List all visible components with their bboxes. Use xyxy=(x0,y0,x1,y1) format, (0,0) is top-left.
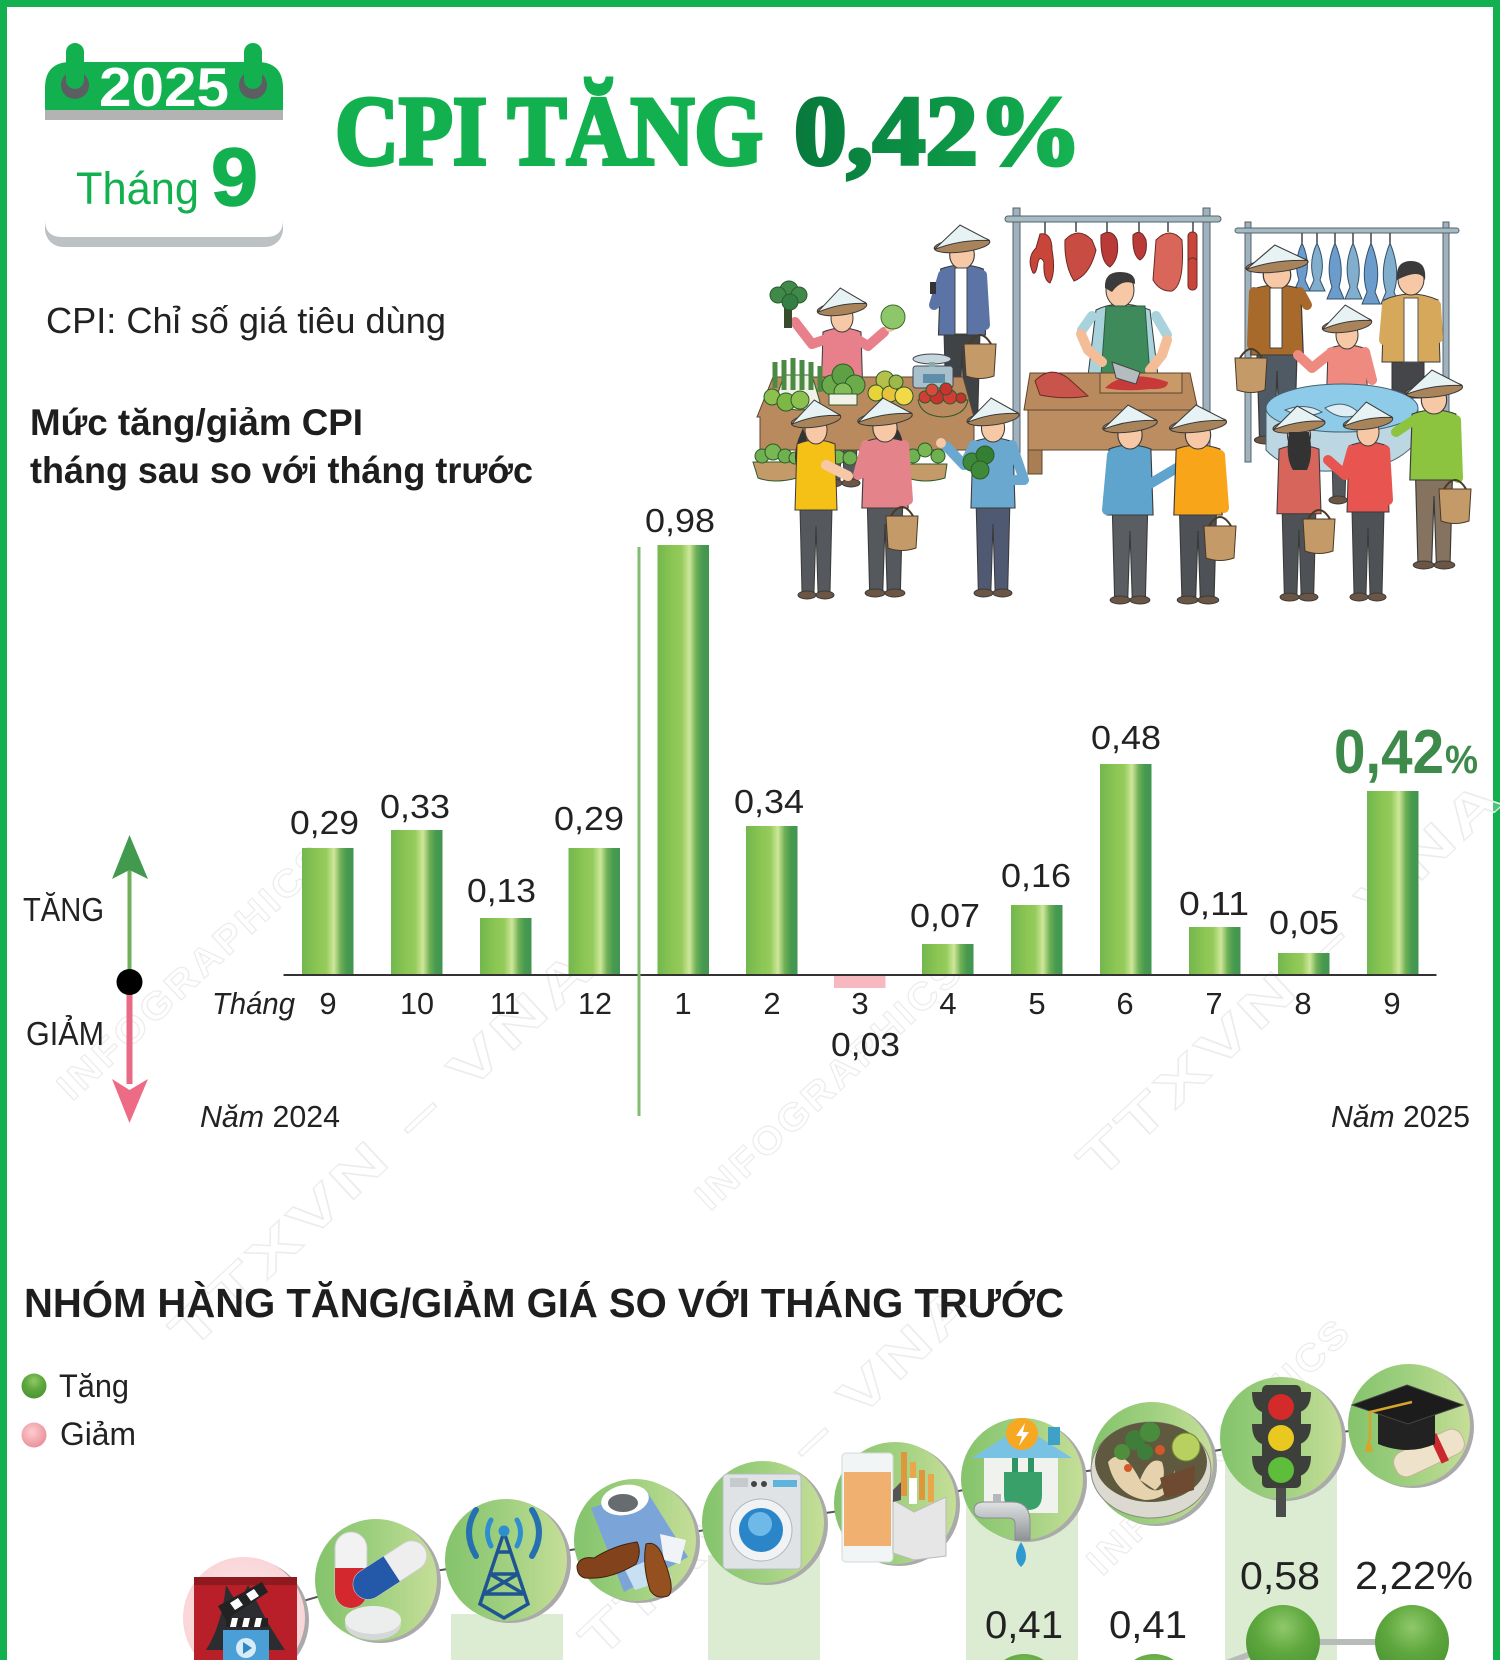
bar chart: monthly CPI change: 7 xyxy=(1205,986,1223,1021)
disc: transport xyxy=(1220,1377,1346,1517)
meat rack xyxy=(1005,208,1221,453)
shopper in red xyxy=(1328,399,1394,601)
bar chart: monthly CPI change: 12 xyxy=(578,986,612,1021)
bar chart: monthly CPI change: 6 xyxy=(1116,986,1134,1021)
title: % xyxy=(978,77,1082,186)
illustration: market scene xyxy=(753,208,1471,604)
disc: household goods xyxy=(702,1461,828,1585)
watermark: INFOGRAPHICS xyxy=(49,836,338,1109)
bar chart: monthly CPI change xyxy=(200,502,1478,1134)
chart heading: Mức tăng/giảm CPI xyxy=(30,402,363,443)
bar chart: monthly CPI change: Năm 2024 xyxy=(200,1099,340,1134)
bar chart: monthly CPI change: 0,98 xyxy=(645,502,715,539)
connector line between group discs xyxy=(244,1425,1409,1618)
bar chart: monthly CPI change: 9 xyxy=(319,986,337,1021)
value labels: group changes xyxy=(985,1555,1473,1647)
butcher xyxy=(1081,272,1167,376)
butcher table xyxy=(1024,362,1198,474)
disc: food services xyxy=(1091,1402,1217,1526)
value labels: group changes: 0,41 xyxy=(1109,1604,1187,1647)
calendar icon: 2025 xyxy=(99,56,229,118)
disc: housing, electricity and water xyxy=(961,1418,1087,1567)
bar chart: monthly CPI change: 0,11 xyxy=(1179,885,1249,922)
up/down direction arrow: TĂNG xyxy=(23,891,104,928)
value labels: group changes: 0,41 xyxy=(985,1604,1063,1647)
shopper in green xyxy=(1396,367,1471,569)
man with phone and basket xyxy=(930,222,996,424)
value labels: group changes: 0,58 xyxy=(1240,1555,1320,1598)
scale xyxy=(913,354,953,388)
bar chart: monthly CPI change: 0,42 xyxy=(1334,718,1444,787)
calendar icon: Tháng xyxy=(76,163,199,214)
light green column backgrounds xyxy=(451,1440,1337,1660)
bar chart: monthly CPI change: Tháng xyxy=(212,986,295,1021)
watermark: INFOGRAPHICS xyxy=(687,949,972,1219)
title: 0,42 xyxy=(794,77,978,186)
bar chart: monthly CPI change: 0,03 xyxy=(831,1026,900,1063)
bar chart: monthly CPI change: Năm 2025 xyxy=(1331,1099,1470,1134)
up/down direction arrow: GIẢM xyxy=(26,1015,104,1052)
shopper in red from behind xyxy=(1270,403,1335,601)
bar chart: monthly CPI change: 0,16 xyxy=(1001,857,1071,894)
disc: education xyxy=(1348,1364,1474,1488)
watermark: INFOGRAPHICS xyxy=(1079,1310,1360,1583)
title xyxy=(335,77,1082,186)
bar chart: monthly CPI change: 0,34 xyxy=(734,783,804,820)
shopper in blue from behind xyxy=(1100,402,1191,604)
bar chart: monthly CPI change: 10 xyxy=(400,986,434,1021)
bar chart: monthly CPI change: % xyxy=(1445,738,1478,782)
shopper in yellow xyxy=(788,397,848,599)
disc: beverages and cigarettes xyxy=(834,1442,960,1566)
disc: culture and entertainment xyxy=(183,1557,309,1660)
legend: Tăng xyxy=(59,1368,129,1404)
up/down direction arrow xyxy=(23,835,148,1123)
watermark: TTXVN – VNA xyxy=(569,1272,988,1660)
bar chart: monthly CPI change: 11 xyxy=(490,986,520,1021)
produce on the table xyxy=(753,358,968,481)
disc: medicine xyxy=(315,1519,441,1643)
bar chart: monthly CPI change: 0,33 xyxy=(380,788,450,825)
water tub with fish xyxy=(1266,384,1418,471)
fish rack xyxy=(1235,222,1459,462)
bar chart: monthly CPI change: 1 xyxy=(674,986,692,1021)
shopper in orange xyxy=(1166,402,1236,604)
value dots: group changes xyxy=(988,1605,1449,1660)
bar chart: monthly CPI change: 2 xyxy=(763,986,781,1021)
bar chart: monthly CPI change: 8 xyxy=(1294,986,1312,1021)
vegetable stall table xyxy=(757,377,974,450)
value labels: group changes: 2,22% xyxy=(1355,1555,1473,1598)
section heading: product groups: NHÓM HÀNG TĂNG/GIẢM GIÁ SO VỚI THÁNG TRƯỚC xyxy=(24,1280,1064,1326)
shopper in blue with greens xyxy=(936,395,1024,597)
bar chart: monthly CPI change: 0,29 xyxy=(554,800,624,837)
CPI definition: CPI: Chỉ số giá tiêu dùng xyxy=(46,300,446,341)
bar chart: monthly CPI change: 0,13 xyxy=(467,872,536,909)
legend: Giảm xyxy=(60,1416,136,1452)
bar chart: monthly CPI change: 0,07 xyxy=(910,897,980,934)
bar chart: monthly CPI change: 0,05 xyxy=(1269,904,1339,941)
legend xyxy=(22,1368,136,1452)
fish sellers and shoppers at back xyxy=(1235,242,1440,504)
chart heading xyxy=(30,402,533,491)
watermark xyxy=(49,766,1500,1660)
chart heading: tháng sau so với tháng trước xyxy=(30,450,533,491)
shopper in pink xyxy=(855,395,918,597)
seller with greens and melon xyxy=(770,281,905,487)
calendar icon xyxy=(45,43,283,247)
bar chart: monthly CPI change: 4 xyxy=(939,986,957,1021)
bar chart: monthly CPI change: 5 xyxy=(1028,986,1046,1021)
watermark: TTXVN – VNA xyxy=(159,936,608,1361)
bar chart: monthly CPI change: 3 xyxy=(851,986,869,1021)
bar chart: monthly CPI change: 0,29 xyxy=(290,804,359,841)
bar chart: monthly CPI change: 9 xyxy=(1383,986,1401,1021)
disc: clothing and footwear xyxy=(574,1479,700,1603)
watermark: TTXVN – VNA xyxy=(1067,766,1500,1191)
bar chart: monthly CPI change: 0,48 xyxy=(1091,719,1161,756)
title: CPI TĂNG xyxy=(335,77,763,186)
calendar icon: 9 xyxy=(211,132,258,223)
disc: post and telecommunications xyxy=(445,1499,571,1623)
